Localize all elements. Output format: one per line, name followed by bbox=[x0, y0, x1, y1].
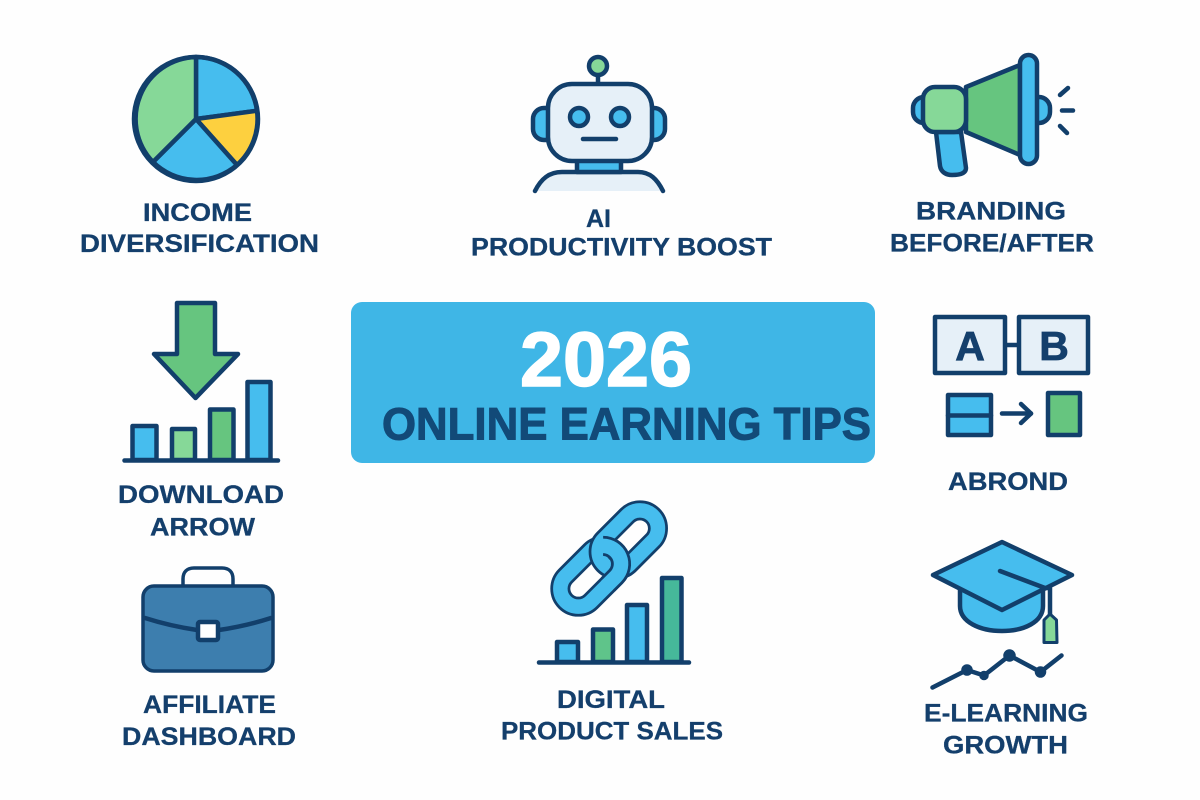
panel: affiliate dashboard bbox=[122, 568, 296, 751]
label: AI productivity boost: PRODUCTIVITY BOOST bbox=[471, 234, 772, 262]
icon: graduation cap bbox=[933, 542, 1072, 642]
label: income diversification: DIVERSIFICATION bbox=[80, 230, 319, 258]
label: affiliate dashboard: AFFILIATE bbox=[143, 691, 276, 719]
icon: A/B test bbox=[935, 317, 1088, 435]
label: affiliate dashboard: DASHBOARD bbox=[122, 723, 296, 751]
panel: abrond bbox=[935, 317, 1088, 496]
label: e-learning growth bbox=[924, 700, 1088, 760]
label: AI productivity boost bbox=[471, 205, 772, 262]
icon: pie chart bbox=[134, 57, 258, 181]
label: digital product sales: PRODUCT SALES bbox=[501, 718, 723, 746]
label: income diversification bbox=[80, 199, 319, 258]
label: download arrow: DOWNLOAD bbox=[118, 481, 284, 509]
icon letters: A and B: A bbox=[955, 323, 985, 369]
panel: income diversification bbox=[80, 57, 319, 258]
icon: briefcase bbox=[143, 568, 273, 671]
panel: download arrow bbox=[118, 303, 284, 542]
icon letters: A and B bbox=[955, 323, 1069, 369]
label: e-learning growth: E-LEARNING bbox=[924, 700, 1088, 728]
icon: growth line bbox=[932, 652, 1062, 688]
panel: branding before/after bbox=[890, 55, 1094, 258]
label: branding before/after bbox=[890, 198, 1094, 258]
label: digital product sales bbox=[501, 686, 723, 746]
label: branding before/after: BEFORE/AFTER bbox=[890, 230, 1094, 258]
label: download arrow bbox=[118, 481, 284, 542]
title: online earning tips: ONLINE EARNING TIPS bbox=[382, 398, 871, 450]
label: income diversification: INCOME bbox=[143, 199, 252, 227]
icon: chain link bbox=[553, 503, 665, 614]
icon: megaphone bbox=[913, 55, 1073, 175]
icon: download arrow over bar chart bbox=[124, 303, 278, 460]
label: abrond: ABROND bbox=[948, 468, 1068, 496]
label: branding before/after: BRANDING bbox=[916, 198, 1066, 226]
label: AI productivity boost: AI bbox=[586, 205, 611, 233]
icon: bar chart bbox=[539, 578, 689, 662]
title banner bbox=[351, 302, 875, 463]
icon letters: A and B: B bbox=[1039, 323, 1069, 369]
panel: e-learning growth bbox=[924, 542, 1088, 760]
icon: robot bbox=[533, 57, 665, 191]
label: e-learning growth: GROWTH bbox=[943, 732, 1068, 760]
title: year: 2026 bbox=[520, 317, 692, 403]
panel: AI productivity boost bbox=[471, 57, 772, 262]
label: affiliate dashboard bbox=[122, 691, 296, 751]
panel: digital product sales bbox=[501, 503, 723, 746]
label: digital product sales: DIGITAL bbox=[557, 686, 665, 714]
label: download arrow: ARROW bbox=[150, 514, 255, 542]
